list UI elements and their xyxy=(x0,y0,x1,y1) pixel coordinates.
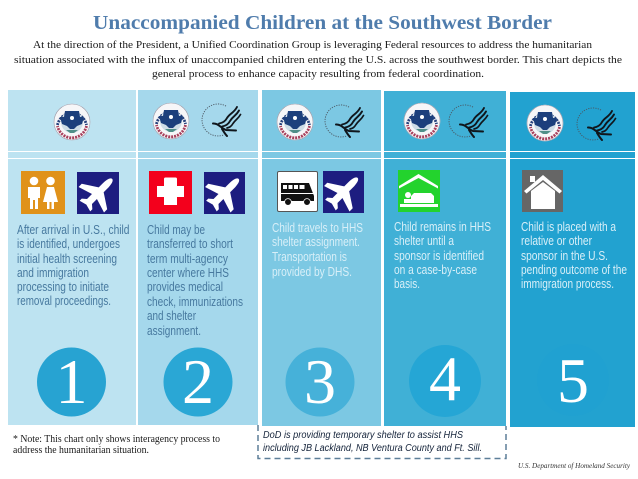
number 3: 3 xyxy=(304,346,336,417)
icon: shelter bed xyxy=(398,170,440,212)
panel: step 5 xyxy=(510,92,635,427)
step 2 text: transferred to short xyxy=(147,237,233,251)
step 5 text xyxy=(521,220,627,291)
step 4 text xyxy=(394,220,491,291)
step 2 text: Child may be xyxy=(147,223,205,237)
step 2 text: and shelter xyxy=(147,309,196,323)
icon: medical cross xyxy=(149,171,192,214)
step 4 text: shelter until a xyxy=(394,234,454,248)
intro text: general process to enhance capacity resulting from federal coordination. xyxy=(152,68,484,80)
icon: HHS eagle xyxy=(577,108,616,140)
footnote xyxy=(13,434,220,456)
step 3 text: shelter assignment. xyxy=(272,235,360,249)
panel: step 3 xyxy=(262,90,381,426)
source credit: U.S. Department of Homeland Security xyxy=(518,461,631,470)
step 4 text: on a case-by-case xyxy=(394,263,477,277)
step 1 text: removal proceedings. xyxy=(17,294,111,308)
icon: bus xyxy=(278,172,318,212)
icon: airplane xyxy=(199,166,251,219)
step 3 text: Transportation is xyxy=(272,250,347,264)
step 4 text: Child remains in HHS xyxy=(394,220,491,234)
icon: HHS eagle xyxy=(325,105,364,137)
step 2 text: check, immunizations xyxy=(147,295,243,309)
step 5 text: relative or other xyxy=(521,234,592,248)
icon: DHS seal xyxy=(527,105,563,141)
step 5 text: sponsor in the U.S. xyxy=(521,249,608,263)
step 5 text: immigration process. xyxy=(521,277,614,291)
icon: DHS seal xyxy=(153,103,189,139)
step 2 text: center where HHS xyxy=(147,266,229,280)
icon: HHS eagle xyxy=(449,105,488,137)
step 1 text: initial health screening xyxy=(17,252,117,266)
number 3 xyxy=(286,346,354,417)
intro text: At the direction of the President, a Unified Coordination Group is leveraging Federal resources to address the humanitarian xyxy=(33,39,593,51)
callout: DoD shelter: DoD is providing temporary shelter to assist HHS xyxy=(263,430,463,441)
number 2: 2 xyxy=(182,346,214,417)
step 2 text xyxy=(147,223,243,338)
panel: step 4 xyxy=(384,91,506,426)
footnote: * Note: This chart only shows interagency process to xyxy=(13,434,220,445)
step 1 text: and immigration xyxy=(17,266,89,280)
step 1 text: is identified, undergoes xyxy=(17,237,120,251)
icon: airplane xyxy=(72,166,125,219)
step 2 text: assignment. xyxy=(147,324,201,338)
icon: house xyxy=(522,170,563,212)
step 5 text: Child is placed with a xyxy=(521,220,616,234)
step 1 text: After arrival in U.S., child xyxy=(17,223,130,237)
step 1 text xyxy=(17,223,130,308)
number 2 xyxy=(164,346,232,417)
step 3 text xyxy=(272,221,363,279)
number 4 xyxy=(409,343,481,417)
callout: DoD shelter: including JB Lackland, NB Ventura County and Ft. Sill. xyxy=(263,443,482,454)
step 4 text: basis. xyxy=(394,277,420,291)
number 5: 5 xyxy=(557,345,589,416)
title: Unaccompanied Children at the Southwest Border xyxy=(93,12,552,34)
step 4 text: sponsor is identified xyxy=(394,249,484,263)
step 2 text: term multi-agency xyxy=(147,252,229,266)
intro text: situation associated with the influx of unaccompanied children entering the U.S. across the southwest border. This chart depicts the xyxy=(14,54,622,66)
number 1 xyxy=(37,346,106,417)
step 3 text: Child travels to HHS xyxy=(272,221,363,235)
icon: airplane xyxy=(318,165,370,218)
icon: family xyxy=(21,171,65,214)
callout: DoD shelter xyxy=(258,425,506,458)
panel: step 1 xyxy=(8,90,136,425)
number 5 xyxy=(537,344,609,416)
footnote: address the humanitarian situation. xyxy=(13,445,149,456)
intro text xyxy=(14,39,622,80)
number 1: 1 xyxy=(56,346,88,417)
step 1 text: processing to initiate xyxy=(17,280,109,294)
icon: DHS seal xyxy=(404,103,440,139)
icon: HHS eagle xyxy=(202,104,240,136)
step 2 text: provides medical xyxy=(147,280,223,294)
icon: DHS seal xyxy=(277,104,313,140)
number 4: 4 xyxy=(429,343,461,414)
icon: DHS seal xyxy=(54,104,90,140)
panel: step 2 xyxy=(138,90,258,425)
step 3 text: provided by DHS. xyxy=(272,265,352,279)
